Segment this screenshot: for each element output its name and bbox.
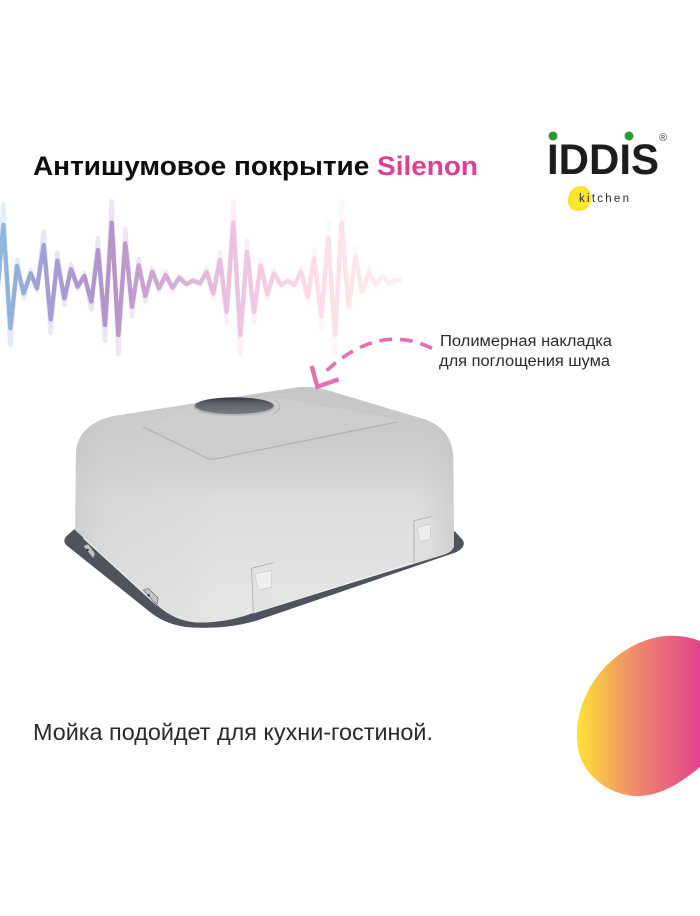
wave line — [0, 223, 402, 335]
plate top outline — [143, 398, 397, 427]
clip front — [252, 563, 274, 613]
arrow dashed curve — [327, 339, 432, 371]
logo yellow spot — [568, 186, 591, 211]
arrow head — [312, 366, 339, 387]
noise-damping plate — [143, 398, 397, 459]
drain outer — [193, 397, 275, 416]
arrow: dashed pointer to plate — [312, 339, 432, 387]
bracket left — [83, 544, 95, 558]
logo kitchen word: kitchen — [579, 193, 629, 205]
logo wordmark: IDDIS — [547, 136, 659, 184]
caption: Мойка подойдет для кухни-гостиной. — [33, 719, 433, 745]
gradient blob — [577, 636, 700, 796]
logo green dot right — [624, 132, 634, 140]
title: Антишумовое покрытие Silenon — [33, 151, 478, 181]
callout text: Полимерная накладка — [440, 333, 612, 350]
wave echo — [0, 202, 402, 354]
plate surface — [143, 398, 397, 459]
logo registered mark: ® — [659, 132, 667, 144]
sink bottom edge highlight — [83, 538, 413, 613]
bracket right — [143, 588, 158, 605]
drain opening — [195, 397, 274, 414]
clip right — [414, 517, 432, 563]
plate bottom outline — [143, 422, 397, 459]
logo green dot left — [548, 132, 558, 140]
sink — [64, 380, 464, 628]
drain swirl — [273, 401, 280, 414]
logo: IDDIS kitchen — [547, 132, 667, 211]
callout text: для поглощения шума — [439, 353, 610, 370]
sound wave — [0, 202, 402, 354]
sink body — [70, 380, 460, 627]
drain hole — [193, 397, 280, 416]
sink rim — [64, 529, 464, 628]
